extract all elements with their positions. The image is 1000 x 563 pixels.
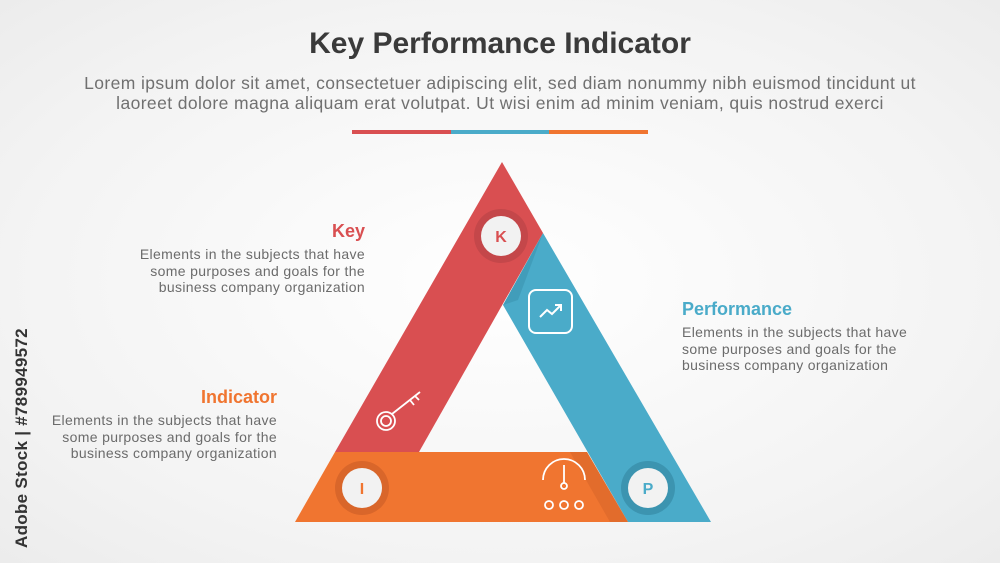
text: Performance xyxy=(682,299,907,373)
icon: key xyxy=(377,392,420,430)
text: Indicator: Indicator xyxy=(201,387,277,407)
circle K xyxy=(474,209,528,263)
title: Key Performance Indicator xyxy=(309,27,691,60)
circle P xyxy=(621,461,675,515)
text: Indicator xyxy=(52,387,277,461)
text: Key: business company organization xyxy=(159,279,365,295)
subtitle: laoreet dolore magna aliquam erat volutpat. Ut wisi enim ad minim veniam, quis nostrud exerci xyxy=(116,92,884,112)
text: Indicator: business company organization xyxy=(71,445,277,461)
text: Indicator: some purposes and goals for the xyxy=(62,428,277,444)
subtitle xyxy=(84,73,916,112)
text: Performance: Elements in the subjects that have xyxy=(682,324,907,340)
text: Key xyxy=(140,221,365,295)
text: Key: Elements in the subjects that have xyxy=(140,246,365,262)
text: Key: some purposes and goals for the xyxy=(150,262,365,278)
blue band xyxy=(503,233,711,522)
subtitle: Lorem ipsum dolor sit amet, consectetuer adipiscing elit, sed diam nonummy nibh euismod tincidunt ut xyxy=(84,73,916,93)
text: Performance: some purposes and goals for the xyxy=(682,340,897,356)
circle I: I xyxy=(360,481,364,498)
text: Performance: Performance xyxy=(682,299,792,319)
watermark vertical: Adobe Stock | #789949572 xyxy=(12,328,31,548)
orange band xyxy=(295,452,628,522)
circle P: P xyxy=(643,481,654,498)
icon: chart xyxy=(529,290,572,333)
icon: gauge xyxy=(543,459,585,509)
circle K: K xyxy=(495,229,507,246)
red band xyxy=(335,162,543,452)
color bar xyxy=(352,130,648,134)
text: Key: Key xyxy=(332,221,365,241)
text: Indicator: Elements in the subjects that have xyxy=(52,412,277,428)
text: Performance: business company organization xyxy=(682,357,888,373)
circle I xyxy=(335,461,389,515)
